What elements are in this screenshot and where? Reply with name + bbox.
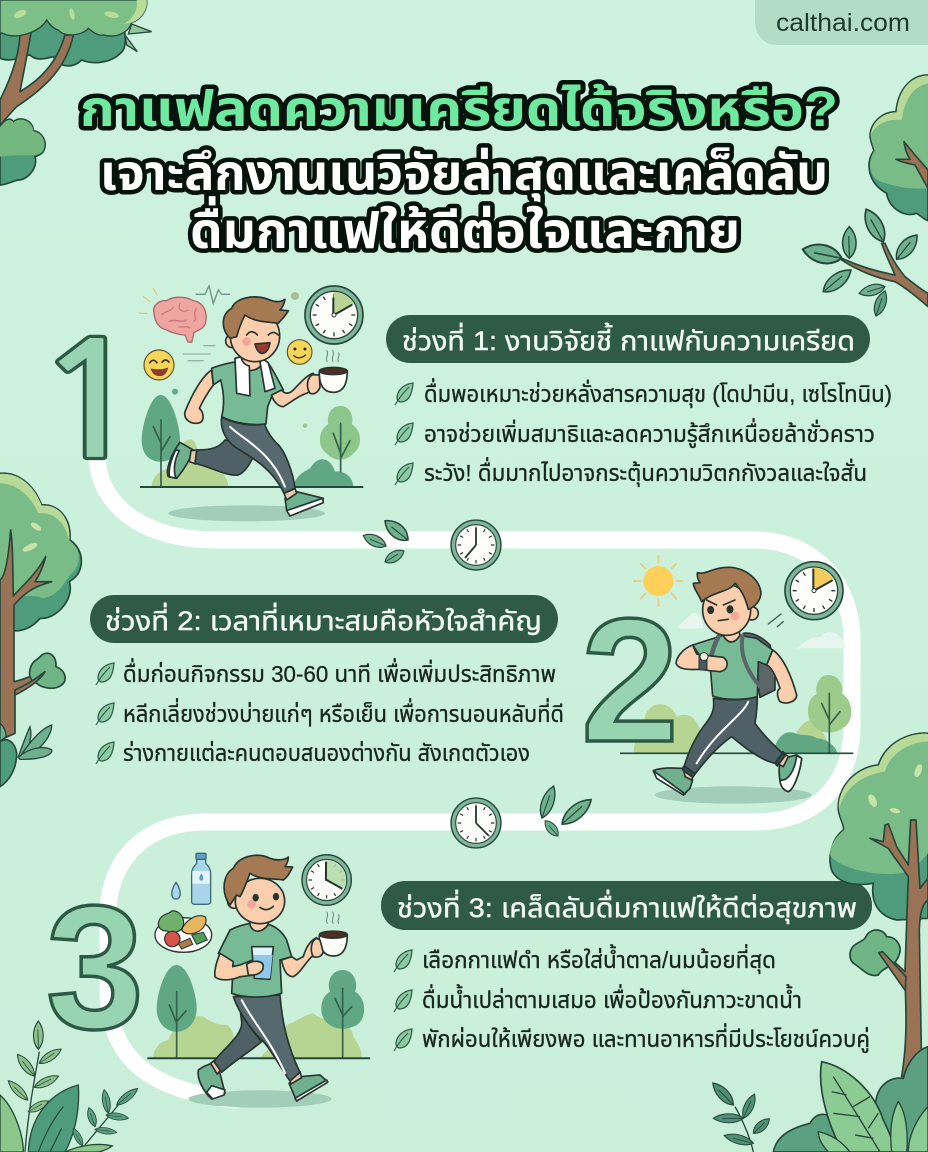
scene 2: park background: [620, 613, 853, 804]
head: [745, 607, 758, 620]
shirt: [212, 362, 283, 425]
title: [80, 81, 838, 259]
pants: [684, 697, 783, 774]
neck: [723, 627, 740, 642]
shoes: [198, 1063, 225, 1099]
bullets section 1: [395, 378, 892, 487]
right shoe: [779, 755, 802, 792]
front leg: [221, 417, 295, 493]
icon: laughing emoji: [144, 350, 174, 380]
title: ดื่มกาแฟให้ดีต่อใจและกาย: [190, 196, 740, 259]
left arm: [215, 953, 261, 980]
bullets section 1: อาจช่วยเพิ่มสมาธิและลดความรู้สึกเหนื่อยล้าชั่วคราว: [424, 418, 875, 449]
bullets section 1: ระวัง! ดื่มมากไปอาจกระตุ้นความวิตกกังวลและใจสั่น: [424, 457, 867, 487]
numeral 2: 2: [581, 583, 679, 779]
bullets section 3: [394, 944, 870, 1054]
heading pill 2: [90, 595, 558, 643]
clock 1: [305, 286, 363, 344]
runner 1: [167, 297, 347, 516]
heading pill 3: ช่วงที่ 3: เคล็ดลับดื่มกาแฟให้ดีต่อสุขภาพ: [397, 889, 857, 924]
title: เจาะลึกงานเนวิจัยล่าสุดและเคล็ดลับ: [100, 145, 828, 203]
bullets section 3: พักผ่อนให้เพียงพอ และทานอาหารที่มีประโยชน์ควบคู่: [422, 1023, 870, 1054]
numeral 1: 1: [32, 323, 149, 482]
towel: [235, 357, 275, 396]
left shoe: [653, 768, 693, 795]
shirt: [693, 635, 773, 699]
scene 1: park background: [140, 292, 363, 521]
bullets section 1: ดื่มพอเหมาะช่วยหลั่งสารความสุข (โดปามีน, เซโรโทนิน): [424, 378, 892, 408]
scene 3: park background: [147, 965, 370, 1108]
leaves near first road clock: [361, 516, 412, 566]
road clock 2: [451, 798, 501, 848]
heading pill 1: ช่วงที่ 1: งานวิจัยชี้ กาแฟกับความเครียด: [402, 322, 855, 356]
winding white path: [97, 458, 852, 1100]
clock 3: [302, 855, 351, 905]
near leg: [214, 1008, 262, 1072]
head: [228, 895, 241, 908]
icon: water drop: [172, 882, 180, 899]
heading pill 1: [386, 315, 870, 363]
tree: lower right: [830, 733, 928, 1077]
icon: sun: [634, 556, 683, 606]
tree: middle left: [0, 473, 81, 787]
far leg: [233, 995, 300, 1081]
bullets section 2: ร่างกายแต่ละคนตอบสนองต่างกัน สังเกตตัวเอง: [123, 740, 530, 766]
title: กาแฟลดความเครียดได้จริงหรือ?: [80, 81, 838, 137]
icon: water bottle: [192, 853, 211, 904]
bullets section 2: ดื่มก่อนกิจกรรม 30-60 นาที เพื่อเพิ่มประสิทธิภาพ: [123, 658, 556, 687]
icon: food plate: [155, 911, 212, 952]
heading pill 2: ช่วงที่ 2: เวลาที่เหมาะสมคือหัวใจสำคัญ: [105, 602, 542, 636]
tree: top left: [0, 0, 152, 185]
runner 3: [198, 855, 347, 1101]
back leg: [195, 440, 253, 475]
runner 2: [653, 567, 802, 795]
plants: bottom left: [0, 1021, 140, 1152]
numeral 3: 3: [46, 870, 144, 1066]
neck: [242, 355, 261, 370]
neck: [250, 917, 268, 931]
tree: upper right: [869, 75, 928, 221]
clock 2: [785, 562, 843, 620]
leaves near second road clock: [537, 784, 595, 839]
road clock 1: [451, 520, 501, 570]
branch with leaves: [801, 206, 928, 318]
right arm: [272, 373, 318, 407]
icon: brain: [139, 286, 230, 361]
bullets section 3: เลือกกาแฟดำ หรือใส่น้ำตาล/นมน้อยที่สุด: [422, 944, 776, 974]
rear arm: [767, 650, 797, 703]
head: [226, 334, 239, 348]
icon: smile emoji: [287, 340, 312, 364]
straps: [710, 637, 718, 662]
bullets section 2: หลีกเลี่ยงช่วงบ่ายแก่ๆ หรือเย็น เพื่อการนอนหลับที่ดี: [123, 698, 564, 727]
watch arm: [676, 645, 727, 672]
left arm: [185, 370, 213, 423]
back shoe: [167, 442, 193, 478]
heading pill 3: [381, 881, 872, 930]
website tab: [755, 0, 928, 45]
website tab: calthai.com: [776, 9, 910, 37]
bullets section 2: [96, 658, 564, 766]
shirt: [218, 923, 292, 997]
bullets section 3: ดื่มน้ำเปล่าตามเสมอ เพื่อป้องกันภาวะขาดน้ำ: [422, 984, 802, 1013]
coffee arm: [282, 938, 322, 977]
glass: [252, 947, 273, 979]
plants: bottom right: [709, 1047, 928, 1152]
backpack: [743, 633, 775, 697]
front shoe: [285, 492, 323, 516]
